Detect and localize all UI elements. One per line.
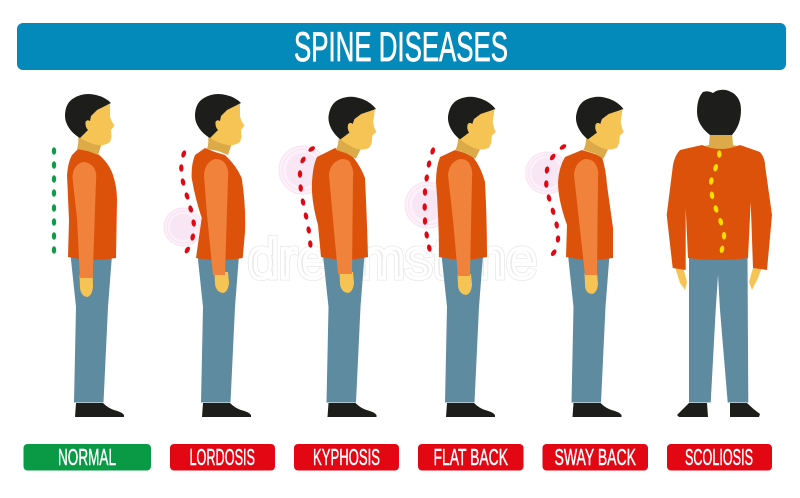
label: kyphosis: KYPHOSIS xyxy=(313,444,380,470)
label: flat back xyxy=(418,444,524,470)
watermark: dreamstime xyxy=(248,227,537,290)
title: SPINE DISEASES xyxy=(294,23,508,70)
spine line: kyphosis curve xyxy=(298,145,316,248)
spine line: straight xyxy=(52,147,56,254)
watermark: dreamstime xyxy=(248,227,537,290)
neck xyxy=(701,132,741,152)
pain rings xyxy=(526,152,568,194)
label: flat back: FLAT BACK xyxy=(434,444,508,470)
shirt xyxy=(667,145,772,270)
pain rings xyxy=(164,208,202,246)
label: sway back: SWAY BACK xyxy=(554,444,636,470)
shoes xyxy=(677,403,760,417)
label: lordosis xyxy=(170,444,275,470)
label: lordosis: LORDOSIS xyxy=(190,444,255,470)
spine line: lordosis curve xyxy=(179,150,196,254)
hair xyxy=(697,90,741,135)
legs xyxy=(689,255,748,402)
label: normal xyxy=(24,444,151,470)
figure: sway back xyxy=(498,0,628,417)
figure: scoliosis (back view) xyxy=(667,90,772,417)
spine line: flat back curve xyxy=(422,147,436,252)
label: sway back xyxy=(542,444,648,470)
figure: lordosis xyxy=(127,0,251,417)
figure: flat back xyxy=(371,0,500,417)
title banner xyxy=(17,23,786,70)
pain rings xyxy=(279,146,327,194)
figure: normal xyxy=(0,0,124,417)
label: scoliosis xyxy=(667,444,772,470)
spine line: scoliosis curve xyxy=(709,150,726,253)
figure: kyphosis xyxy=(252,0,381,417)
label: normal: NORMAL xyxy=(58,444,116,470)
label: kyphosis xyxy=(294,444,399,470)
hands xyxy=(675,267,762,290)
pain rings xyxy=(405,182,451,228)
spine line: sway back curve xyxy=(544,143,567,257)
